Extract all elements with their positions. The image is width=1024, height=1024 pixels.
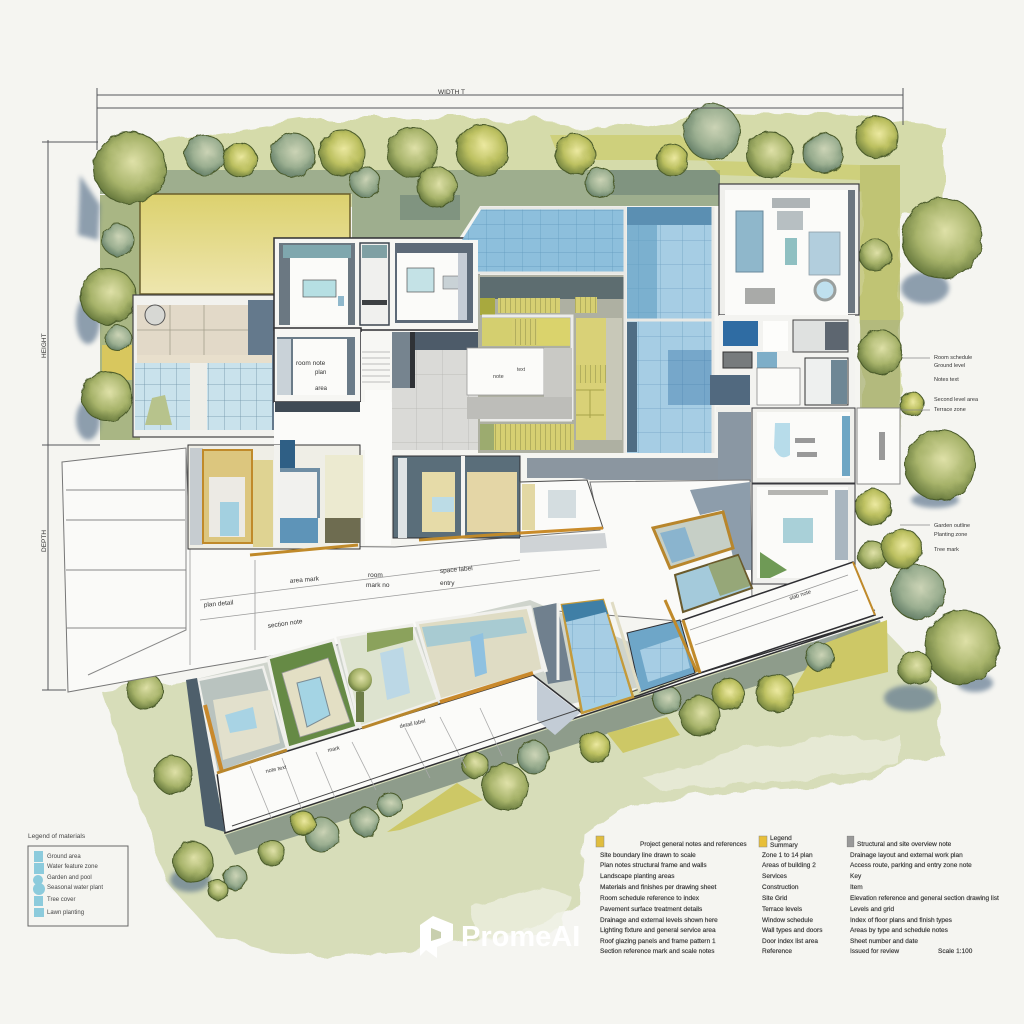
dimension labels: HEIGHT <box>41 333 48 358</box>
room D: plan <box>315 370 326 376</box>
notes column 3: Sheet number and date <box>850 938 918 945</box>
notes column 1: Drainage and external levels shown here <box>600 917 718 924</box>
angled room upper <box>653 512 733 568</box>
room C <box>395 243 473 323</box>
upper courtyard garden <box>100 135 900 408</box>
side annotations: Garden outline <box>934 523 970 529</box>
room D <box>277 337 355 395</box>
wing room 1 <box>198 667 287 773</box>
upper left building <box>274 238 479 402</box>
plaza labels <box>204 565 473 630</box>
wing labels <box>265 719 426 775</box>
notes column 1: Site boundary line drawn to scale <box>600 852 696 859</box>
notes column 2: Terrace levels <box>762 906 803 913</box>
notes column 1: Roof glazing panels and frame pattern 1 <box>600 938 716 945</box>
dimension lines <box>42 88 903 690</box>
notes column 1: Section reference mark and scale notes <box>600 948 715 955</box>
side panel <box>857 408 900 484</box>
plaza labels: mark no <box>366 582 390 589</box>
room B <box>360 243 389 325</box>
plaza labels: room <box>368 572 383 579</box>
legend labels: Seasonal water plant <box>47 885 103 891</box>
blue glass roof <box>462 208 626 273</box>
side annotations: Room schedule <box>934 355 972 361</box>
notes column 3: Structural and site overview note <box>857 841 952 848</box>
notes column 3: Key <box>850 873 862 880</box>
right tower main room <box>719 184 859 315</box>
wing end shadow <box>186 678 225 832</box>
trees: right side <box>855 198 999 685</box>
notes column 2: Services <box>762 873 788 880</box>
plaza labels: section note <box>267 618 303 630</box>
notes column 3: Access route, parking and entry zone note <box>850 862 972 869</box>
notes column 1: Lighting fixture and general service area <box>600 927 716 934</box>
trees: bottom <box>127 643 834 900</box>
notes column 2: Site Grid <box>762 895 788 902</box>
plaza labels: area mark <box>290 575 320 585</box>
plaza labels: entry <box>440 580 455 587</box>
notes column 1: Project general notes and references <box>640 841 747 848</box>
lawn highlights <box>470 735 900 940</box>
legend labels: Ground area <box>47 854 81 860</box>
plaza labels: space label <box>440 565 473 575</box>
notes column 2: Wall types and doors <box>762 927 823 934</box>
legend labels: Water feature zone <box>47 864 98 870</box>
notes column 2: Zone 1 to 14 plan <box>762 852 813 859</box>
middle row rooms <box>393 456 520 540</box>
lower left row rooms <box>188 440 363 555</box>
tilted study room <box>520 480 607 553</box>
notes column 1: Pavement surface treatment details <box>600 906 703 913</box>
wing east slab <box>683 562 875 673</box>
watercolor lawn top <box>110 112 944 440</box>
wing labels: note text <box>265 765 288 775</box>
legend labels <box>47 854 103 916</box>
dimension labels <box>41 89 465 552</box>
legend labels: Garden and pool <box>47 875 92 881</box>
beige tile room <box>137 305 272 363</box>
shadow next to angled rooms <box>690 482 752 570</box>
wing gap <box>528 603 572 684</box>
notes column 2: Areas of building 2 <box>762 862 816 869</box>
side annotations: Ground level <box>934 363 965 369</box>
legend panel: Legend of materials <box>28 833 86 840</box>
notes column 3: Elevation reference and general section drawing list <box>850 895 999 902</box>
notes column 1: Room schedule reference to index <box>600 895 700 902</box>
central grey paved court: text <box>517 367 526 373</box>
yellow garden lawn <box>140 194 350 294</box>
plaza labels: plan detail <box>204 599 234 609</box>
legend panel <box>28 833 128 926</box>
notes column 3: Index of floor plans and finish types <box>850 917 953 924</box>
wing room 6 <box>612 600 697 692</box>
notes column 3: Drainage layout and external work plan <box>850 852 963 859</box>
side annotations: Notes text <box>934 377 959 383</box>
notes column 2: Door index list area <box>762 938 818 945</box>
side annotations: Planting zone <box>934 532 967 538</box>
watercolor lawn bottom <box>102 625 942 958</box>
trees: top row <box>94 104 898 207</box>
tilted lower wing slab <box>192 600 883 833</box>
notes column 2 <box>759 835 823 955</box>
notes column 3: Scale 1:100 <box>938 948 973 955</box>
central yellow slat court <box>478 275 626 453</box>
furniture <box>736 198 840 304</box>
side annotations: Terrace zone <box>934 407 966 413</box>
notes column 1 <box>596 836 747 955</box>
left block <box>133 295 275 437</box>
side annotations <box>900 355 979 553</box>
notes column 3 <box>847 836 999 955</box>
wing room 5 <box>562 600 633 713</box>
wing room 4 <box>417 607 543 702</box>
notes column 2: Legend <box>770 835 792 842</box>
notes column 2: Window schedule <box>762 917 813 924</box>
legend icons <box>33 851 45 917</box>
notes column 3: Levels and grid <box>850 906 894 913</box>
notes column 2: Construction <box>762 884 799 891</box>
notes column 3: Issued for review <box>850 948 899 955</box>
notes column 2: Summary <box>770 842 799 849</box>
notes column 3: Areas by type and schedule notes <box>850 927 949 934</box>
right tower lower room <box>752 484 855 584</box>
stair and circulation <box>274 332 392 545</box>
right tower service rooms <box>710 315 855 407</box>
yellow planting strips <box>387 620 888 832</box>
room A <box>279 243 355 325</box>
tall blue glass block <box>625 207 713 453</box>
notes column 1: Materials and finishes per drawing sheet <box>600 884 717 891</box>
watermark: PromeAI <box>461 921 580 953</box>
dimension labels: DEPTH <box>41 530 48 552</box>
dimension labels: WIDTH T <box>438 89 465 96</box>
angled room lower <box>675 555 752 612</box>
notes column 2: Reference <box>762 948 792 955</box>
side annotations: Second level area <box>934 397 979 403</box>
notes column 3: Item <box>850 884 863 891</box>
shadow beneath lower wing <box>225 620 886 855</box>
watercolor lawn left strip <box>100 195 140 440</box>
wing east slab: slab note <box>789 589 812 602</box>
large white plaza <box>62 448 752 692</box>
central grey paved court: note <box>493 374 504 380</box>
legend labels: Lawn planting <box>47 910 84 916</box>
side annotations: Tree mark <box>934 547 959 553</box>
room D: area <box>315 386 328 392</box>
shadows <box>76 175 993 892</box>
trees: left side <box>80 224 136 421</box>
wing labels: mark <box>327 745 341 754</box>
notes column 1: Plan notes structural frame and walls <box>600 862 707 869</box>
watermark <box>420 916 580 958</box>
blue windows room <box>135 363 272 430</box>
wing labels: detail label <box>399 719 426 730</box>
legend labels: Tree cover <box>47 897 75 903</box>
wing room 3 <box>338 625 438 728</box>
central grey paved court <box>392 332 572 450</box>
room D: room note <box>296 360 326 367</box>
notes column 1: Landscape planting areas <box>600 873 675 880</box>
right tower bath room <box>752 408 855 483</box>
corridor grey band <box>527 407 751 482</box>
wing room 2 <box>268 640 357 748</box>
